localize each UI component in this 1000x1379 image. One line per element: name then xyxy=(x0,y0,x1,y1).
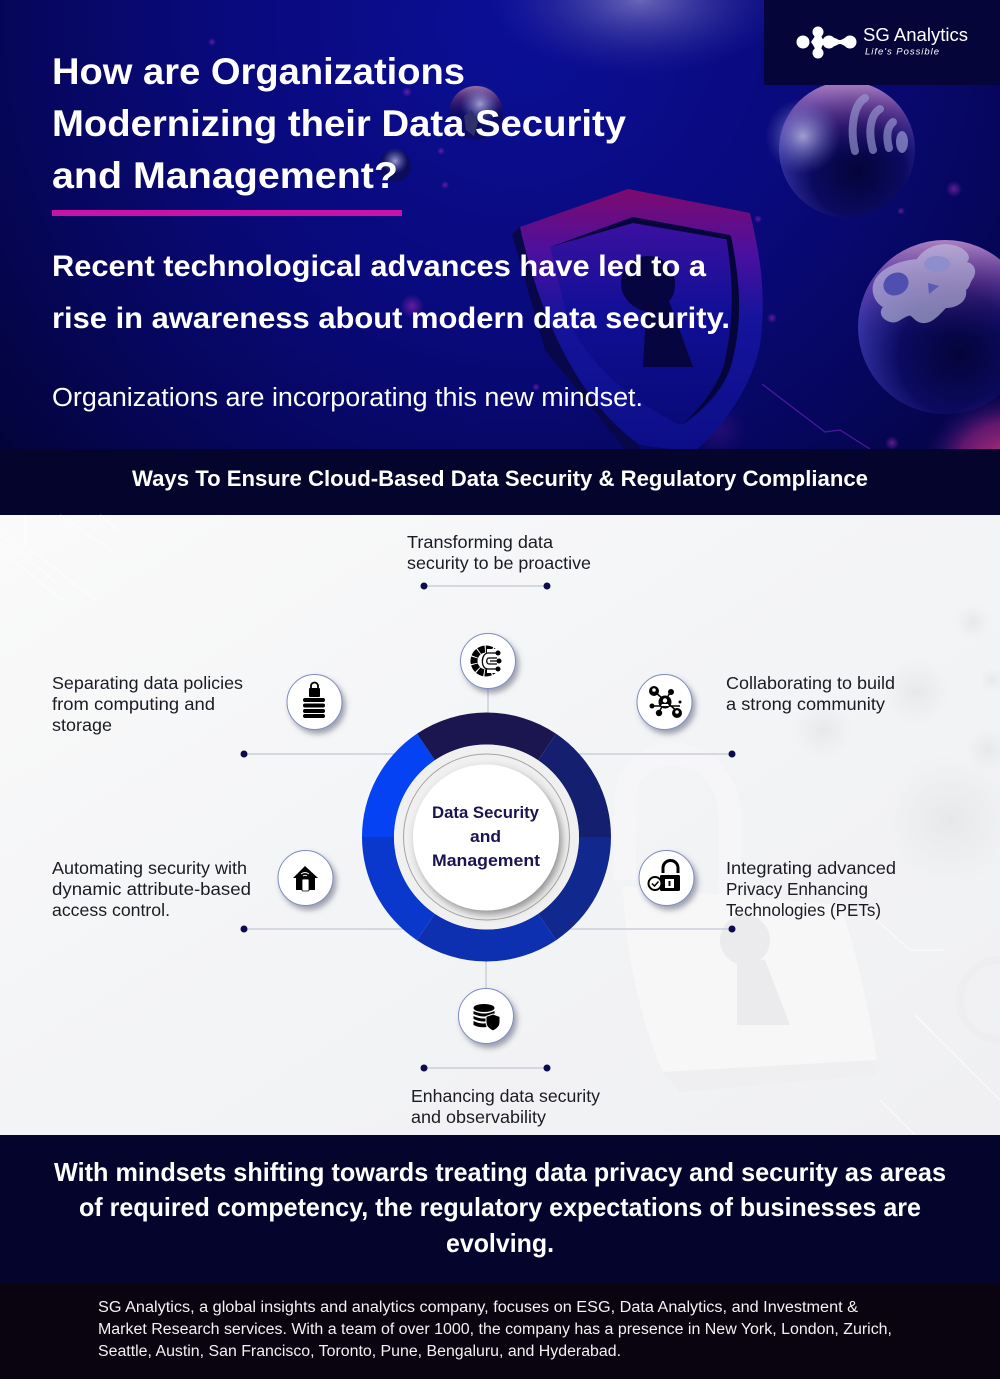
transform label: security to be proactive xyxy=(407,553,591,573)
segment: bottom xyxy=(417,914,556,961)
collaborating label: Collaborating to build xyxy=(726,673,895,693)
circuit line xyxy=(762,384,870,449)
integrating label: Technologies (PETs) xyxy=(726,900,881,920)
icon: database lock xyxy=(287,674,342,730)
footer: Seattle, Austin, San Francisco, Toronto, Pune, Bengaluru, and Hyderabad. xyxy=(98,1343,621,1360)
logo panel: Life's Possible xyxy=(865,46,939,58)
automating label: dynamic attribute-based xyxy=(52,879,251,899)
subtitle: rise in awareness about modern data security. xyxy=(52,302,730,335)
sphere: small behind title xyxy=(449,84,503,140)
integrating label xyxy=(726,858,896,920)
banner: conclusion: evolving. xyxy=(446,1228,554,1258)
transform label: Transforming data xyxy=(407,532,553,552)
automating label: access control. xyxy=(52,900,170,920)
segment: upper left xyxy=(362,734,435,837)
sphere: bottom-right pink xyxy=(932,400,1000,449)
subtitle xyxy=(52,250,730,335)
separating label xyxy=(52,673,243,735)
icon: network people xyxy=(637,674,692,730)
footer xyxy=(0,1283,1000,1379)
separating label: storage xyxy=(52,715,112,735)
separating label: Separating data policies xyxy=(52,673,243,693)
segment: top xyxy=(417,713,556,760)
faint padlock xyxy=(623,754,877,1092)
enhancing label: and observability xyxy=(411,1107,546,1127)
banner: conclusion: of required competency, the regulatory expectations of businesses are xyxy=(79,1192,921,1222)
separating label: from computing and xyxy=(52,694,215,714)
banner: conclusion: With mindsets shifting towards treating data privacy and security as areas xyxy=(54,1157,946,1187)
banner: conclusion xyxy=(0,1135,1000,1283)
transform label xyxy=(407,532,591,573)
collaborating label: a strong community xyxy=(726,694,885,714)
automating label xyxy=(52,858,251,920)
icon: database shield xyxy=(458,988,514,1044)
automating label: Automating security with xyxy=(52,858,247,878)
icon: padlock check xyxy=(639,850,694,906)
footer: Market Research services. With a team of over 1000, the company has a presence in New York, London, Zurich, xyxy=(98,1321,892,1338)
title: and Management? xyxy=(52,155,398,196)
connectors to ring xyxy=(240,688,736,1072)
banner: ways to ensure: Ways To Ensure Cloud-Based Data Security & Regulatory Compliance xyxy=(132,466,868,491)
inner disc xyxy=(394,744,579,930)
logo panel: SG Analytics xyxy=(863,24,968,45)
integrating label: Integrating advanced xyxy=(726,858,896,878)
title underline xyxy=(52,210,402,216)
panel: diagram background xyxy=(0,515,1000,1135)
segment: upper right xyxy=(538,734,611,837)
subtitle: Recent technological advances have led to a xyxy=(52,250,706,283)
icon: gear circuit xyxy=(460,634,516,688)
sphere: skull xyxy=(858,240,1000,414)
donut ring xyxy=(362,713,611,961)
center label: Management xyxy=(432,852,541,870)
center label: Data Security xyxy=(432,804,540,822)
center label xyxy=(432,804,541,870)
title: Modernizing their Data Security xyxy=(52,103,626,144)
logo mark xyxy=(796,26,856,58)
panel: hero background xyxy=(0,0,1000,492)
banner: ways to ensure xyxy=(0,449,1000,515)
title: How are Organizations xyxy=(52,51,465,92)
collaborating label xyxy=(726,673,895,714)
footer: SG Analytics, a global insights and analytics company, focuses on ESG, Data Analytics, and Investment & xyxy=(98,1299,859,1316)
top connector xyxy=(420,582,550,590)
intro sentence: Organizations are incorporating this new mindset. xyxy=(52,384,643,412)
enhancing label xyxy=(411,1086,600,1127)
enhancing label: Enhancing data security xyxy=(411,1086,600,1106)
sphere: small xyxy=(379,148,411,182)
segment: lower right xyxy=(538,837,611,940)
segment: lower left xyxy=(362,837,435,940)
title xyxy=(52,51,626,196)
center label: and xyxy=(470,828,501,846)
icon: smart home xyxy=(278,850,333,906)
shield with keyhole xyxy=(512,189,763,449)
logo panel xyxy=(764,0,1000,85)
integrating label: Privacy Enhancing xyxy=(726,879,868,899)
sphere: wifi xyxy=(765,82,915,218)
